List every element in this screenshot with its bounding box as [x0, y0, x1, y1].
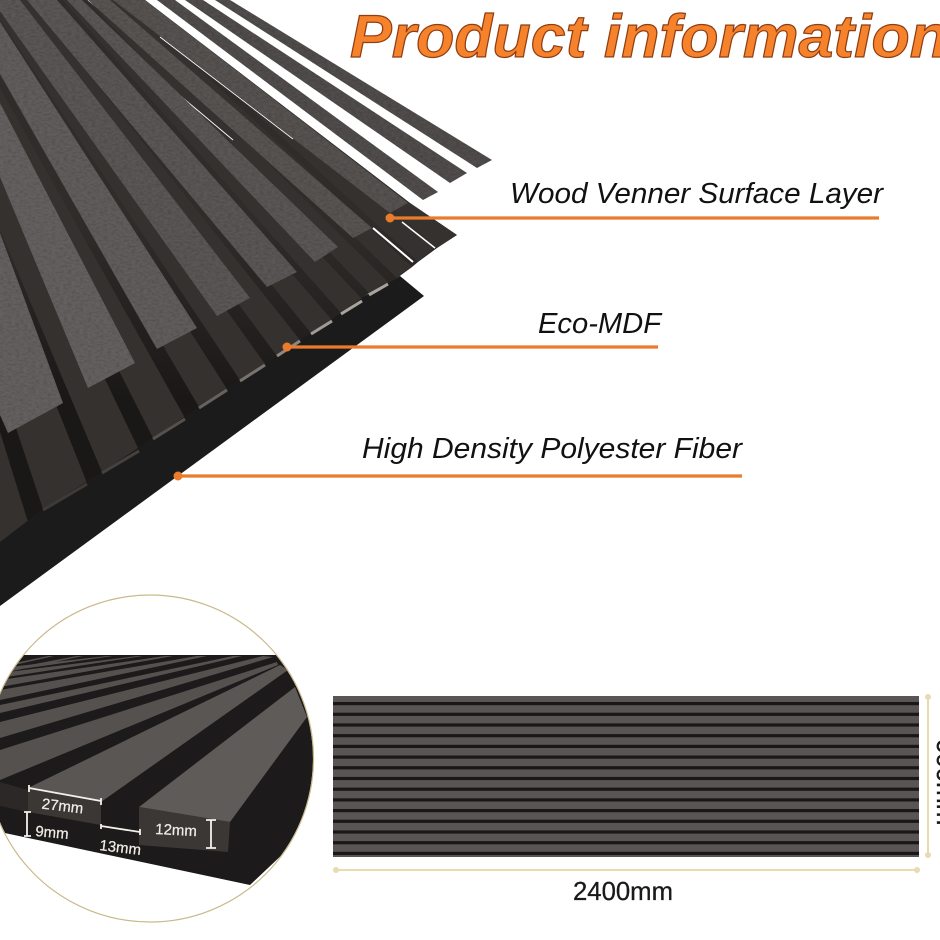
slat layer base	[0, 0, 457, 542]
wood veneer strips	[0, 0, 492, 433]
dimension: 27mm: 27mm	[41, 796, 84, 818]
slat 12mm top	[139, 687, 307, 822]
far slats	[0, 656, 278, 780]
slat 12mm front	[139, 807, 230, 852]
circular detail: slat dimensions	[0, 595, 340, 922]
dimension: 9mm: 9mm	[35, 823, 69, 843]
label text: Eco-MDF	[538, 308, 663, 340]
slat end faces	[43, 284, 388, 510]
dimension: 12mm	[155, 820, 216, 848]
dimension: 13mm: 13mm	[99, 837, 142, 859]
dimension: 12mm: 12mm	[155, 821, 197, 840]
felt backing layer	[0, 276, 424, 606]
callout: eco-MDF	[282, 308, 663, 352]
width end dots	[333, 867, 339, 873]
width line	[336, 869, 917, 871]
height line	[927, 697, 929, 855]
callout: high density polyester fiber	[174, 433, 743, 480]
width dimension	[333, 867, 920, 906]
leader line	[287, 345, 658, 349]
Eco-MDF slats	[0, 0, 457, 542]
circle clipped cross-section	[0, 655, 340, 885]
front view panel	[333, 696, 919, 857]
gold ring	[0, 595, 314, 922]
leader dot	[282, 342, 292, 352]
leader dot	[174, 472, 182, 480]
width label: 2400mm	[573, 876, 673, 906]
dimension: 9mm	[24, 812, 69, 843]
height end dots	[925, 694, 931, 700]
exploded panel illustration	[0, 0, 492, 606]
leader line	[178, 474, 742, 478]
leader line	[390, 216, 879, 220]
title: Product information	[350, 3, 940, 70]
dimension: 27mm	[29, 785, 101, 818]
label text: High Density Polyester Fiber	[362, 433, 743, 465]
white slits between slats	[88, 0, 435, 262]
slat 27mm top	[28, 665, 288, 802]
panel grooves	[333, 702, 919, 855]
label text: Wood Venner Surface Layer	[510, 178, 884, 210]
height dimension	[925, 694, 940, 858]
left slat front	[0, 782, 28, 812]
callout: wood veneer surface layer	[386, 178, 884, 222]
dimension: 13mm	[99, 824, 142, 859]
slat 27mm front	[28, 788, 101, 825]
felt base	[0, 655, 340, 885]
panel body	[333, 696, 919, 857]
leader dot	[386, 214, 394, 222]
